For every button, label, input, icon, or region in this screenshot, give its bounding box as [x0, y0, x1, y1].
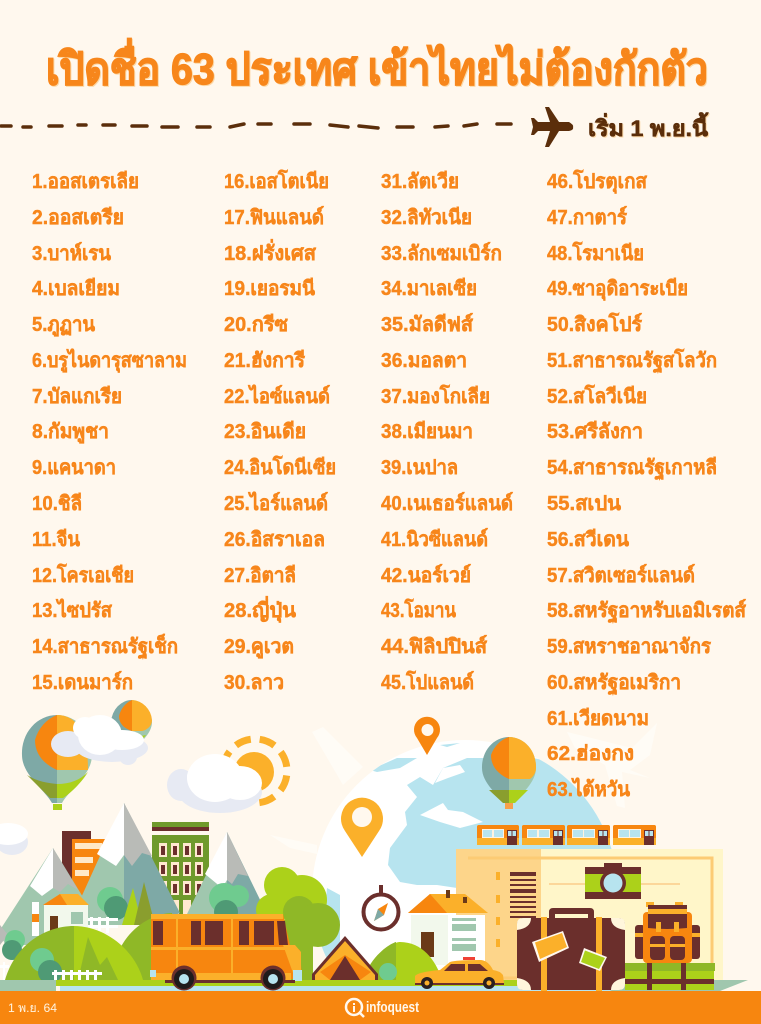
illustration: pin orange	[414, 717, 440, 755]
country list column 4: 46.โปรตุเกส	[547, 169, 648, 194]
illustration: green hills	[0, 913, 180, 984]
country list column 4: 52.สโลวีเนีย	[547, 384, 647, 408]
start date label: เริ่ม 1 พ.ย.นี้	[588, 112, 709, 141]
country list column 4: 48.โรมาเนีย	[547, 241, 644, 265]
country list column 2: 21.ฮังการี	[224, 349, 305, 372]
country list column 1: 7.บัลแกเรีย	[32, 385, 122, 408]
country list column 1: 1.ออสเตรเลีย	[32, 170, 139, 193]
country list column 3: 40.เนเธอร์แลนด์	[381, 492, 513, 515]
country list column 1: 10.ชิลี	[32, 492, 82, 515]
country list column 1: 14.สาธารณรัฐเช็ก	[32, 633, 178, 660]
illustration: right hill	[365, 942, 442, 981]
illustration: small house	[32, 894, 118, 936]
country list column 3: 44.ฟิลิปปินส์	[381, 635, 488, 658]
illustration: camera	[585, 863, 641, 899]
illustration: backpack	[635, 902, 700, 990]
illustration: balloon 3	[482, 737, 536, 809]
country list column 2: 27.อิตาลี	[224, 564, 296, 587]
illustration: balloon 1	[22, 715, 92, 810]
country list column 2	[224, 169, 336, 694]
country list column 4: 57.สวิตเซอร์แลนด์	[547, 564, 695, 587]
illustration: mountains	[0, 803, 267, 945]
country list column 1: 8.กัมพูชา	[32, 421, 109, 445]
country list column 1: 15.เดนมาร์ก	[32, 671, 133, 694]
country list column 3: 39.เนปาล	[381, 457, 458, 479]
country list column 1: 2.ออสเตรีย	[32, 206, 124, 229]
illustration: bus	[150, 914, 302, 990]
country list column 1: 13.ไซปรัส	[32, 598, 113, 622]
country list column 2: 28.ญี่ปุ่น	[224, 595, 296, 623]
illustration: cloud top left	[51, 715, 148, 765]
country list column 2: 16.เอสโตเนีย	[224, 169, 329, 193]
country list column 3: 36.มอลตา	[381, 350, 467, 372]
country list column 3: 32.ลิทัวเนีย	[381, 206, 472, 229]
country list column 2: 23.อินเดีย	[224, 420, 306, 443]
illustration: faint tower	[312, 727, 363, 785]
country list column 3: 45.โปแลนด์	[381, 670, 474, 694]
illustration: sun	[223, 739, 287, 803]
dashed flight path	[1, 124, 511, 128]
country list column 2: 25.ไอร์แลนด์	[224, 491, 328, 515]
country list column 3: 38.เมียนมา	[381, 420, 473, 443]
country list column 3	[381, 170, 513, 694]
country list column 1: 4.เบลเยียม	[32, 277, 120, 300]
country list column 4: 60.สหรัฐอเมริกา	[547, 672, 681, 696]
country list column 1: 12.โครเอเชีย	[32, 563, 134, 587]
country list column 3: 33.ลักเซมเบิร์ก	[381, 242, 502, 265]
illustration: globe	[313, 740, 612, 970]
country list column 3: 41.นิวซีแลนด์	[381, 528, 488, 551]
footer bar	[0, 991, 761, 1024]
country list column 1: 9.แคนาดา	[32, 457, 116, 479]
country list column 2: 30.ลาว	[224, 672, 284, 694]
illustration: ground	[0, 980, 748, 991]
country list column 2: 18.ฝรั่งเศส	[224, 238, 317, 265]
illustration: suitcase	[517, 908, 625, 991]
country list column 4: 54.สาธารณรัฐเกาหลี	[547, 456, 717, 481]
country list column 4: 53.ศรีลังกา	[547, 420, 643, 443]
country list column 3: 35.มัลดีฟส์	[381, 313, 474, 336]
country list column 2: 26.อิสราเอล	[224, 529, 325, 551]
illustration: balloon 2	[111, 700, 152, 753]
country list column 1: 3.บาห์เรน	[32, 242, 111, 265]
country list column 4: 55.สเปน	[547, 493, 621, 515]
country list column 3: 34.มาเลเซีย	[381, 277, 477, 300]
country list column 4: 63.ไต้หวัน	[547, 777, 630, 801]
country list column 4: 59.สหราชอาณาจักร	[547, 636, 711, 658]
illustration: faint airplane left of globe	[270, 835, 317, 854]
illustration: train	[477, 825, 656, 845]
illustration: tent	[312, 936, 378, 980]
illustration: books	[625, 963, 715, 990]
country list column 1: 11.จีน	[32, 528, 80, 551]
illustration: pin yellow	[341, 798, 383, 857]
illustration: faint airplane behind list	[567, 723, 657, 808]
illustration: ticket	[456, 849, 723, 980]
illustration: taxi	[415, 957, 504, 989]
country list column 3: 42.นอร์เวย์	[381, 564, 471, 587]
country list column 4: 47.กาตาร์	[547, 206, 627, 229]
country list column 4: 62.ฮ่องกง	[547, 743, 634, 765]
country list column 4: 61.เวียดนาม	[547, 707, 649, 730]
country list column 4: 56.สวีเดน	[547, 528, 629, 551]
country list column 4: 49.ซาอุดิอาระเบีย	[547, 277, 688, 301]
country list column 2: 20.กรีซ	[224, 313, 288, 336]
country list column 2: 19.เยอรมนี	[224, 277, 315, 300]
illustration: cloud far left	[0, 823, 28, 855]
country list column 3: 43.โอมาน	[381, 598, 456, 622]
country list column 2: 22.ไอซ์แลนด์	[224, 384, 330, 408]
illustration: right house	[408, 890, 488, 965]
country list column 2: 29.คูเวต	[224, 636, 294, 660]
country list column 4: 50.สิงคโปร์	[547, 312, 642, 336]
icon: airplane	[531, 107, 573, 147]
illustration: brown and orange buildings	[62, 831, 106, 899]
illustration: compass	[364, 885, 398, 930]
country list column 1: 6.บรูไนดารุสซาลาม	[32, 348, 187, 374]
footer logo	[346, 999, 419, 1017]
country list column 4: 51.สาธารณรัฐสโลวัก	[547, 348, 717, 374]
country list column 1	[32, 170, 187, 694]
country list column 3: 31.ลัตเวีย	[381, 170, 459, 193]
country list column 4	[547, 169, 747, 801]
country list column 2: 24.อินโดนีเซีย	[224, 455, 336, 479]
country list column 3: 37.มองโกเลีย	[381, 384, 490, 408]
footer logo: infoquest	[366, 999, 419, 1016]
country list column 1: 5.ภูฏาน	[32, 314, 95, 338]
illustration: bushes behind	[2, 882, 249, 960]
illustration: green building	[152, 822, 209, 917]
country list column 4: 58.สหรัฐอาหรับเอมิเรตส์	[547, 599, 747, 624]
illustration: cloud by sun	[167, 754, 262, 813]
footer date: 1 พ.ย. 64	[8, 1001, 57, 1015]
illustration: trees behind bus	[256, 867, 340, 980]
country list column 2: 17.ฟินแลนด์	[224, 206, 324, 229]
